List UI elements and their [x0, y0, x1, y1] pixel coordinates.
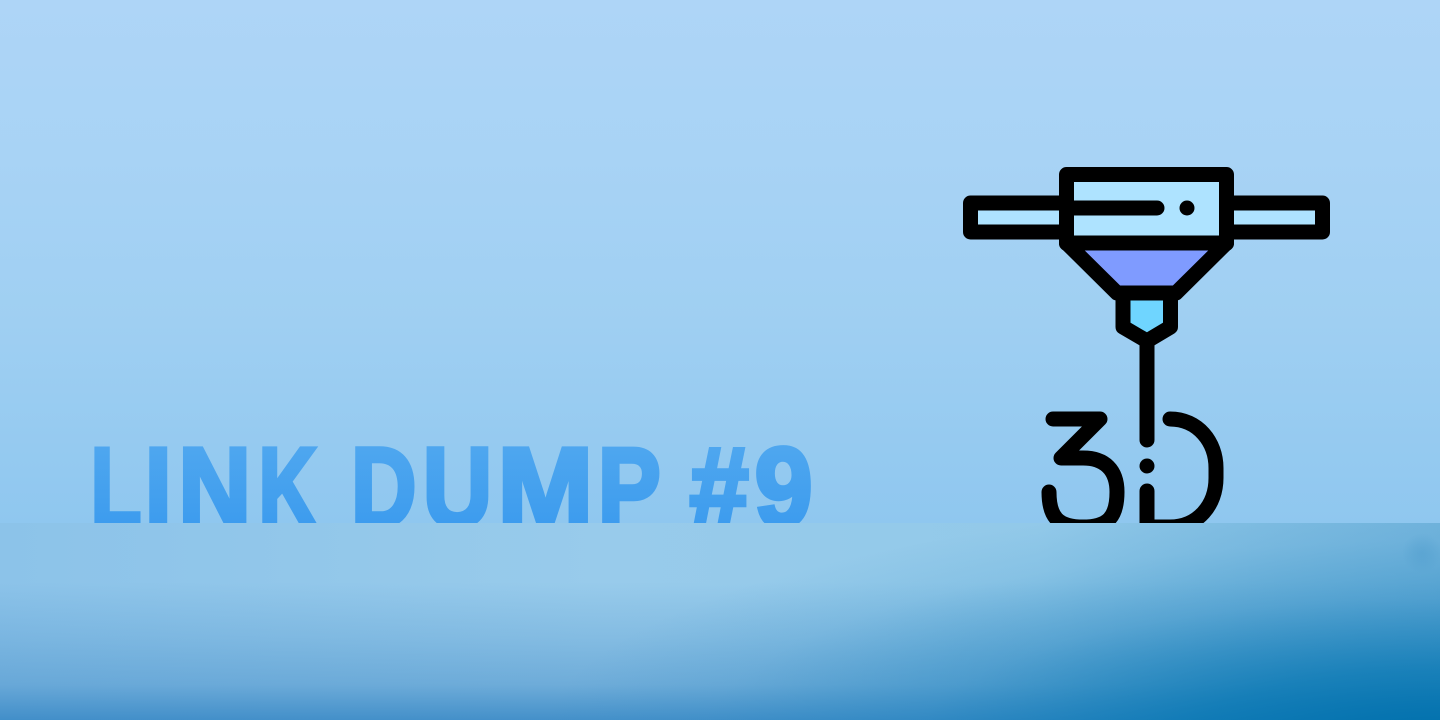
filament line [1140, 341, 1154, 440]
title: LINK DUMP #9: 9 [755, 425, 813, 550]
nozzle [1123, 293, 1170, 341]
artwork layer [94, 167, 1330, 523]
background: upper sky gradient [0, 0, 1440, 523]
icon: 3D printer [970, 174, 1322, 527]
title: LINK DUMP #9: # [690, 425, 749, 550]
title: LINK DUMP #9: D [351, 425, 416, 550]
title: LINK DUMP #9: P [598, 425, 661, 550]
title: LINK DUMP #9: U [423, 425, 492, 550]
title: LINK DUMP #9: K [258, 425, 317, 550]
numeral 3 [1049, 419, 1117, 527]
title: LINK DUMP #9: M [497, 425, 593, 550]
title: LINK DUMP #9: L [90, 425, 141, 550]
title: LINK DUMP #9: N [178, 425, 251, 550]
print head body [1066, 174, 1226, 244]
letter D with dot [1140, 419, 1216, 527]
title: LINK DUMP #9: I [145, 425, 172, 550]
title: LINK DUMP #9 [94, 445, 811, 523]
funnel [1066, 243, 1226, 293]
gantry rail [970, 203, 1322, 232]
background: lower darker band [0, 523, 1440, 720]
status line and dot [1066, 200, 1194, 216]
